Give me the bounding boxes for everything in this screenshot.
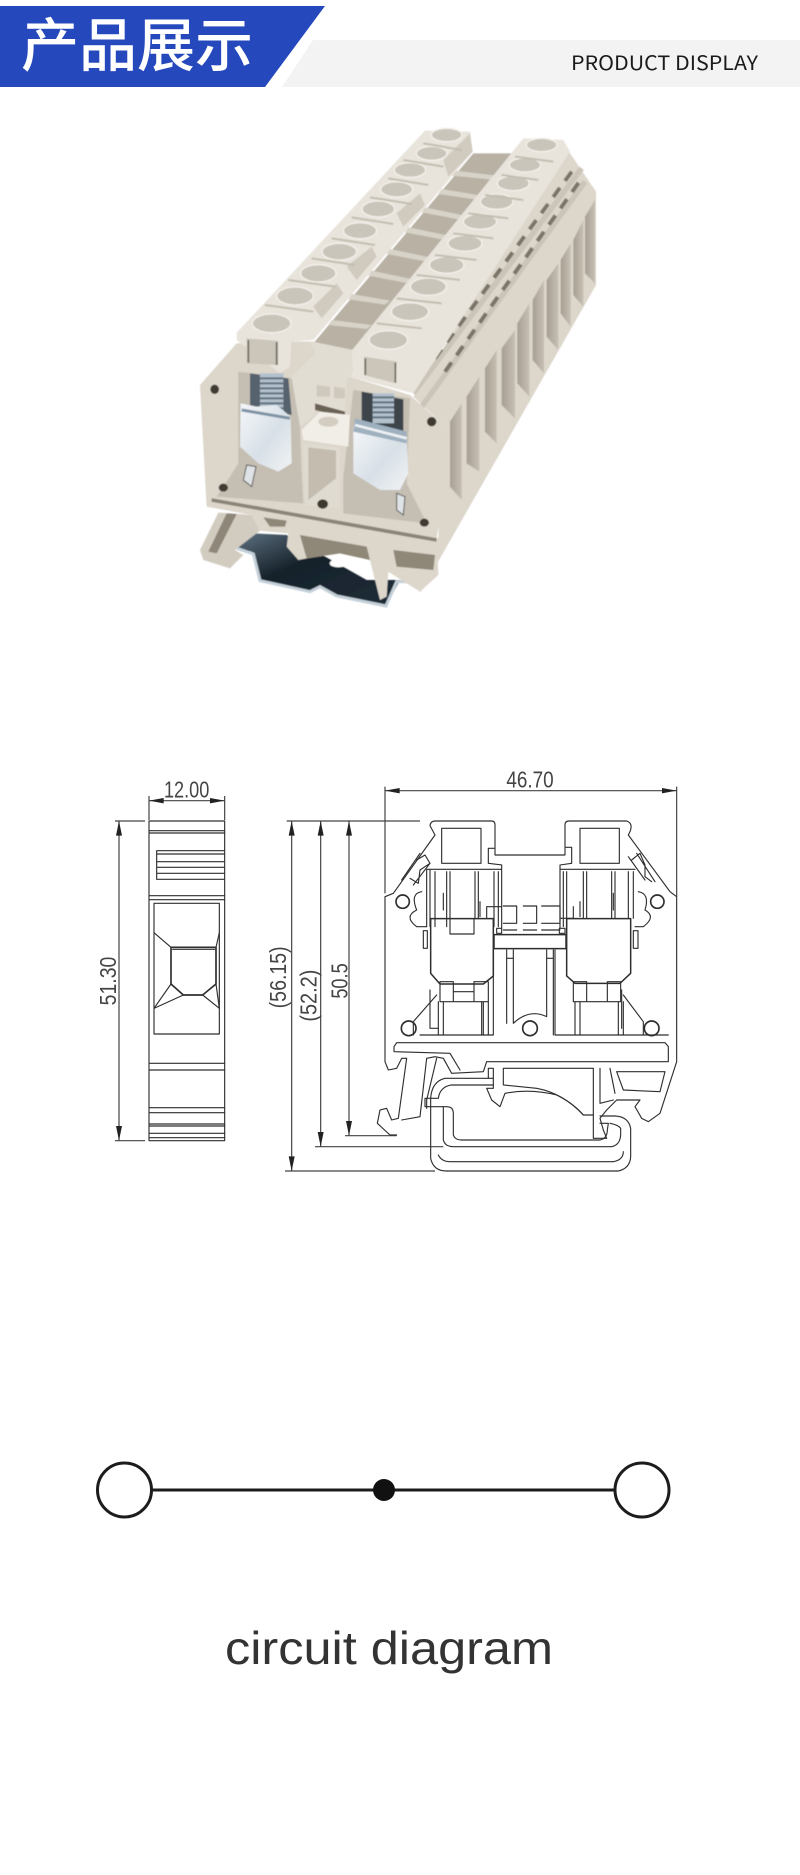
right top strip (350, 138, 570, 393)
connecting wire (151, 1488, 615, 1492)
corner features (402, 853, 655, 1035)
mounting holes (210, 385, 436, 527)
label 56.15: (56.15) (265, 946, 291, 1008)
dimension drawing: front view (265, 767, 677, 1171)
left terminal circle (98, 1463, 152, 1517)
width dimension 12.00: 12.00 (164, 776, 209, 802)
header banner (0, 0, 800, 87)
left tower side wall (290, 353, 315, 427)
subtitle: PRODUCT DISPLAY (571, 47, 758, 76)
height dimension 51.30 (95, 821, 145, 1141)
left pocket (217, 372, 303, 503)
width dimension 46.70 (385, 767, 677, 897)
top recessed channel (313, 153, 513, 350)
metal clamps (240, 403, 408, 515)
mounting foot (200, 513, 260, 568)
width dimension 46.70: 46.70 (506, 767, 554, 793)
centre cross slots (443, 893, 613, 930)
banner blue title block (0, 6, 325, 87)
left screw holes (252, 128, 462, 333)
label 52.2: (52.2) (296, 970, 322, 1022)
DIN rail (237, 533, 412, 606)
rail hole highlight (330, 559, 347, 567)
right pocket (343, 390, 427, 523)
height dimensions (265, 821, 443, 1171)
centre node (373, 1479, 395, 1501)
upper square windows (442, 828, 481, 863)
side slots (450, 200, 595, 500)
metal clamps (431, 919, 631, 984)
screws (260, 373, 394, 423)
banner grey strip (282, 40, 800, 87)
width dimension 12.00 (149, 776, 225, 820)
terminal profile (377, 821, 677, 1171)
circuit diagram (98, 1463, 669, 1517)
side wall (413, 148, 596, 593)
left hole ridges (265, 143, 462, 312)
lower rail groove (212, 500, 437, 540)
hook slit (208, 513, 237, 553)
label 50.5: 50.5 (327, 963, 353, 999)
right terminal circle (615, 1463, 669, 1517)
side profile outline (149, 821, 225, 1141)
left top strip (237, 131, 473, 373)
side vent rows (413, 165, 585, 407)
circuit diagram caption: circuit diagram (225, 1622, 553, 1674)
outer outline (377, 821, 677, 1138)
right hole ridges (377, 157, 553, 328)
height dimension 51.30: 51.30 (95, 957, 121, 1005)
front face (200, 342, 443, 600)
DIN rail section (425, 1078, 631, 1171)
dimension drawing: side view (95, 776, 225, 1141)
title: 产品展示 (21, 0, 253, 83)
right screw holes (369, 138, 557, 349)
foot openings (263, 517, 435, 570)
centre wall with bridge (302, 342, 353, 509)
mounting holes (396, 895, 664, 1036)
product photo: terminal block (200, 128, 596, 606)
